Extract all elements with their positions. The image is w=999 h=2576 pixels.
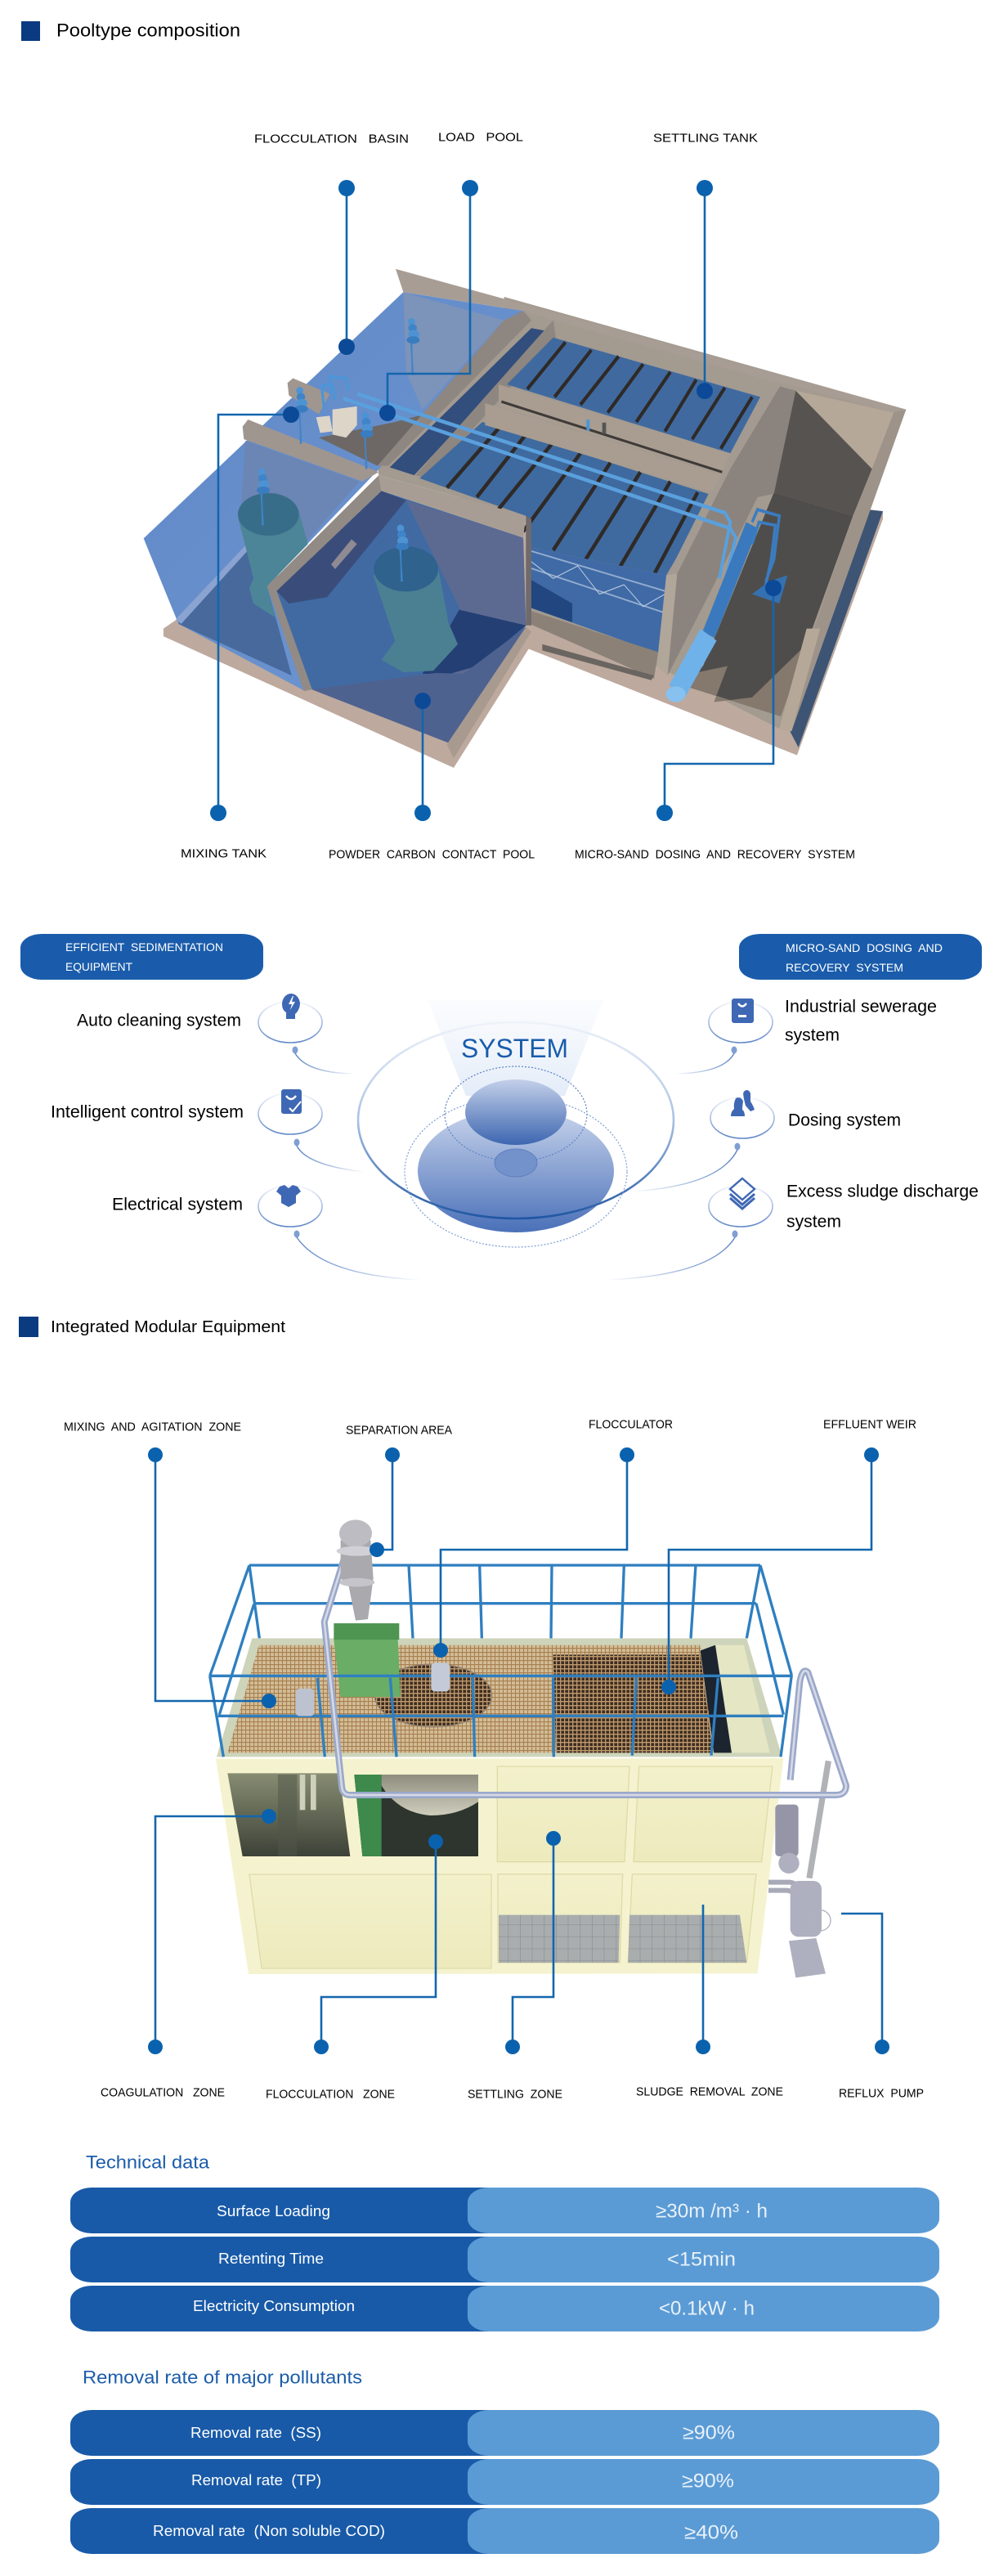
leader: coagulation zone [148, 1809, 276, 2054]
railing [210, 1565, 791, 1757]
leader: micro-sand system [656, 580, 782, 821]
grating [227, 1645, 714, 1752]
heading: Removal rate of major pollutants: Removal rate of major pollutants [83, 2367, 362, 2388]
item: auto cleaning system: Auto cleaning system [77, 1011, 241, 1030]
concrete block underlay [378, 297, 906, 729]
large ring [358, 1022, 674, 1218]
dashed rings [445, 1066, 587, 1161]
item: electrical system [112, 1185, 421, 1280]
item: intelligent control system: Intelligent control system [51, 1102, 244, 1122]
light beam [428, 1000, 603, 1096]
label: powder carbon contact pool: POWDER CARBON CONTACT POOL [329, 847, 535, 862]
leader: flocculator [433, 1447, 634, 1658]
leader: mixing and agitation zone [148, 1447, 276, 1708]
panel: right pill: MICRO-SAND DOSING AND [786, 941, 943, 954]
table row: retenting time: Retenting Time [218, 2251, 324, 2267]
table row: retenting time [70, 2237, 939, 2282]
item: intelligent control system [51, 1089, 364, 1172]
label: settling tank: SETTLING TANK [653, 131, 758, 146]
leader: flocculation zone [314, 1834, 443, 2054]
table row: electricity consumption: <0.1kW · h [659, 2298, 755, 2319]
left pool floor [178, 547, 292, 675]
table row: removal SS: Removal rate (SS) [190, 2425, 321, 2441]
illustration: modular equipment [210, 1519, 846, 1977]
short concrete rim [288, 378, 329, 414]
label: settling zone: SETTLING ZONE [468, 2087, 562, 2102]
leader: reflux pump [841, 1914, 889, 2054]
label: separation area: SEPARATION AREA [346, 1423, 452, 1438]
panel: right pill: RECOVERY SYSTEM [786, 961, 903, 974]
item: industrial sewerage system: system [785, 1025, 840, 1045]
label: flocculator: FLOCCULATOR [589, 1418, 673, 1431]
table row: surface loading: Surface Loading [217, 2203, 330, 2219]
label: flocculation zone: FLOCCULATION ZONE [266, 2087, 395, 2102]
item: auto cleaning system [77, 994, 354, 1074]
upper disc [465, 1079, 567, 1145]
table row: removal SS [70, 2410, 939, 2456]
equipment boxes [316, 406, 357, 438]
label: mixing tank: MIXING TANK [181, 847, 267, 860]
right inner panel [714, 1645, 770, 1752]
black weir band [701, 1645, 732, 1752]
label: effluent weir: EFFLUENT WEIR [823, 1418, 916, 1431]
table row: removal COD: ≥40% [684, 2522, 738, 2543]
table row: removal TP [70, 2459, 939, 2505]
label: mixing and agitation zone: MIXING AND AGITATION ZONE [64, 1420, 241, 1434]
leader: effluent weir [661, 1447, 879, 1694]
tank body [216, 1758, 783, 1974]
panel: left pill: EQUIPMENT [65, 960, 132, 973]
panel: left pill: EFFICIENT SEDIMENTATION [65, 940, 223, 954]
large base disc [418, 1110, 614, 1232]
discharge pipe and frame [666, 509, 787, 702]
leader: powder carbon contact pool [414, 693, 431, 821]
system title: SYSTEM [461, 1034, 568, 1063]
channel walls [378, 311, 531, 466]
item: excess sludge discharge system: system [786, 1212, 841, 1232]
item: excess sludge discharge system: Excess sludge discharge [786, 1183, 979, 1200]
item: dosing system [632, 1090, 901, 1192]
dense media grating [553, 1654, 713, 1752]
item: excess sludge discharge system [607, 1178, 979, 1280]
item: industrial sewerage system: Industrial sewerage [785, 998, 937, 1016]
front contact pool [267, 475, 531, 758]
leader: flocculation basin [338, 180, 355, 355]
table row: removal TP: ≥90% [682, 2470, 734, 2493]
table row: electricity consumption: Electricity Consumption [193, 2298, 355, 2314]
leader: separation area [370, 1447, 400, 1557]
right outer dark edge [791, 509, 883, 747]
left green cylinder [239, 509, 308, 617]
concrete beams [485, 384, 730, 492]
heading: Pooltype composition: Pooltype composition [56, 20, 240, 41]
label: micro-sand dosing and recovery system: MICRO-SAND DOSING AND RECOVERY SYSTEM [575, 847, 855, 862]
left transparent pool volume [144, 292, 523, 691]
table row: retenting time: <15min [667, 2249, 736, 2270]
table row: removal COD: Removal rate (Non soluble COD) [153, 2523, 385, 2539]
upper tank bars [527, 342, 752, 449]
back wall top [396, 269, 906, 413]
upper settling tank [507, 338, 760, 453]
lower settling tank [419, 422, 709, 576]
round separation opening [374, 1664, 492, 1727]
reflux pump and valves [768, 1805, 831, 1977]
illustration: pool structure [144, 269, 906, 768]
floor tiles [499, 1915, 746, 1963]
silver process pipe [325, 1556, 846, 1878]
leader: settling tank [697, 180, 713, 399]
heading: Integrated Modular Equipment: Integrated Modular Equipment [51, 1318, 285, 1336]
blue face below tanks with truss [526, 547, 668, 680]
item: industrial sewerage system [675, 998, 937, 1074]
heading: Technical data: Technical data [86, 2152, 210, 2172]
table row: surface loading: ≥30m /m³ · h [656, 2200, 768, 2223]
long concrete rim [243, 420, 379, 482]
leader: settling zone [505, 1831, 561, 2054]
table row: electricity consumption [70, 2286, 939, 2331]
item: electrical system: Electrical system [112, 1196, 243, 1214]
middle window with green and tank [354, 1775, 478, 1856]
label: load pool: LOAD POOL [438, 131, 523, 144]
leader: sludge removal zone [696, 1905, 710, 2054]
small disc [495, 1149, 537, 1177]
table row: removal SS: ≥90% [683, 2422, 735, 2444]
left window [227, 1773, 350, 1856]
label: reflux pump: REFLUX PUMP [839, 2087, 924, 2100]
green hopper [334, 1623, 401, 1697]
pipes [321, 377, 736, 594]
leader: mixing tank [210, 406, 299, 821]
hydrocyclone [337, 1519, 378, 1621]
lower tank bars [447, 425, 697, 585]
rear chamber glass [403, 292, 504, 410]
diagram: central system [358, 1000, 674, 1247]
right room [656, 381, 906, 731]
top deck [217, 1638, 782, 1757]
panel: right pill [739, 934, 982, 980]
table row: surface loading [70, 2188, 939, 2233]
label: coagulation zone: COAGULATION ZONE [101, 2085, 225, 2100]
panels [249, 1766, 773, 1968]
table row: removal TP: Removal rate (TP) [191, 2472, 321, 2488]
label: flocculation basin: FLOCCULATION BASIN [254, 132, 409, 146]
mixer motors rear [406, 318, 419, 375]
item: dosing system: Dosing system [788, 1111, 901, 1130]
concrete landing [319, 413, 431, 466]
section icon: pooltype square [21, 21, 40, 41]
leader: load pool [379, 180, 478, 421]
small agitators [296, 1663, 450, 1716]
label: sludge removal zone: SLUDGE REMOVAL ZONE [636, 2085, 783, 2098]
panel: left pill [20, 934, 263, 980]
section icon: modular square [19, 1317, 38, 1337]
table row: removal COD [70, 2508, 939, 2554]
base slab [164, 466, 883, 768]
